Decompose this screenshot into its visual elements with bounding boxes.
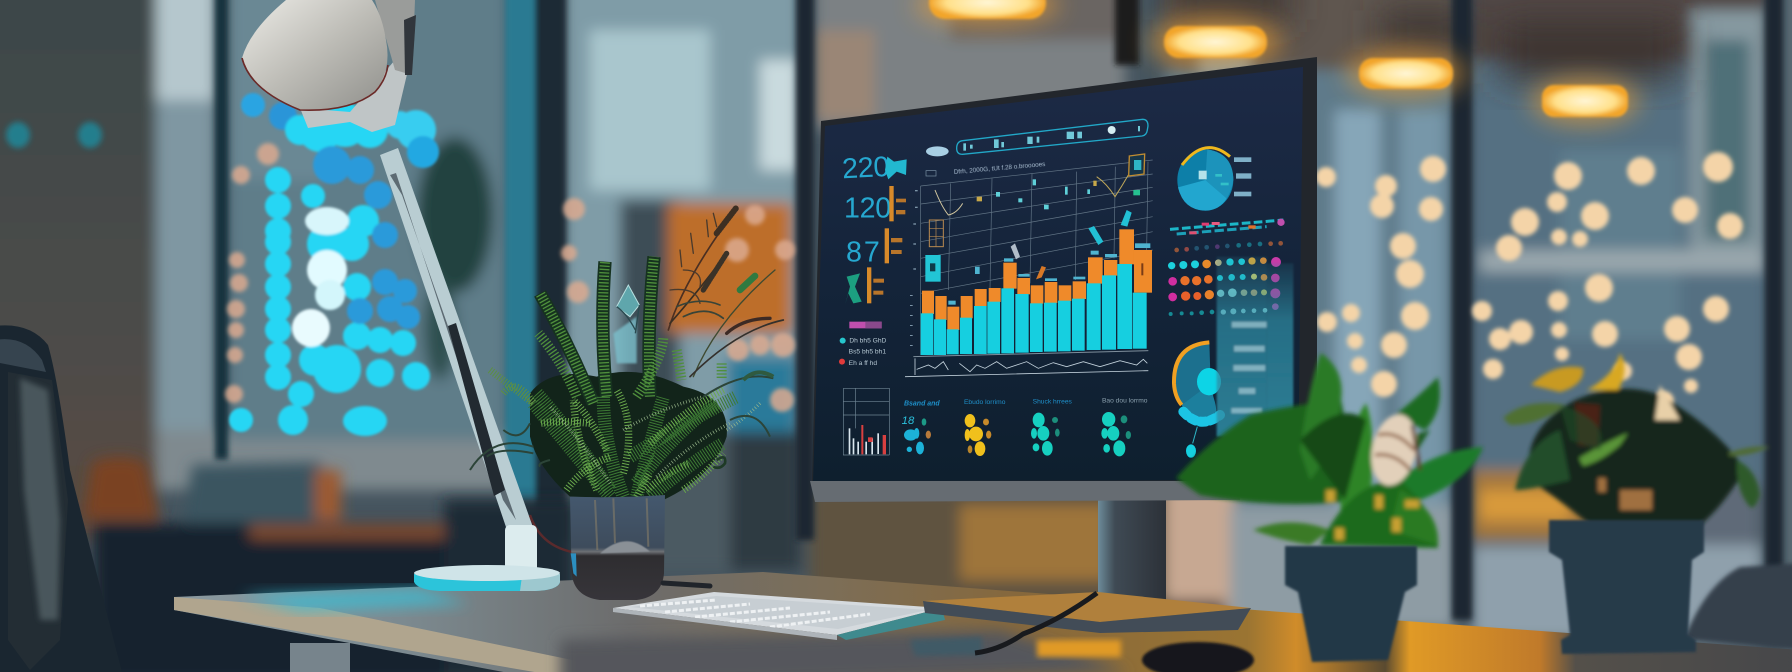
monitor cable and mouse [910, 593, 1254, 672]
pale leaf motif behind fern [613, 285, 639, 363]
bokeh lights: cyan cluster behind lamp [229, 93, 439, 436]
line chart grid [913, 160, 1153, 357]
lamp shade [242, 0, 388, 110]
chart caption: Dfrh, 2000G, tUt f.28 o.brooooes [954, 161, 1046, 176]
brown stems with small leaves [668, 207, 783, 377]
chart callout boxes [925, 154, 1145, 282]
orange segments [922, 229, 1152, 330]
cluster 2: yellow [964, 399, 1006, 456]
right potted plant [1503, 353, 1770, 654]
bokeh lights: warm right side [1316, 152, 1743, 411]
left legend: Bs5 bh5 bh1 [849, 349, 886, 356]
left legend: Eh a ff hd [849, 360, 877, 367]
middle potted plant [1176, 353, 1483, 662]
glass reflection panel [1217, 257, 1293, 437]
KPI: 87: 87 [846, 237, 882, 269]
gauge [1174, 342, 1221, 458]
KPI numbers [841, 151, 907, 305]
KPI: 120: 120 [844, 193, 891, 225]
lamp arm [380, 148, 534, 533]
cluster 4: teal: Bao dou lorrmo [1102, 398, 1148, 405]
cluster 3: teal [1031, 398, 1073, 456]
desk lamp [242, 0, 572, 591]
pie chart [1177, 148, 1251, 211]
desk [174, 572, 1792, 672]
right plant foliage [1503, 353, 1770, 525]
y axis ticks [910, 190, 918, 346]
stacked bar chart [921, 210, 1152, 355]
line chart traces [935, 175, 1128, 215]
middle pot [1285, 546, 1417, 662]
pen lying on desk [663, 583, 710, 586]
color key strips [1170, 219, 1285, 234]
top navigation pill [926, 119, 1148, 156]
foliage mass [530, 372, 727, 500]
office chair in foreground [0, 325, 122, 672]
lamp cable [530, 515, 572, 552]
dot matrix [1168, 241, 1283, 316]
middle plant foliage [1176, 353, 1483, 548]
desk leg [290, 643, 350, 672]
monitor frame [812, 57, 1317, 482]
KPI: 220: 220 [841, 151, 890, 185]
far right chair [1684, 563, 1792, 650]
ceramic vase [570, 495, 665, 600]
cluster 1: blue: 18 [902, 415, 915, 427]
cluster 1: blue: Bsand and [904, 400, 940, 407]
sparkline strip [905, 358, 1148, 377]
dashboard on screen [839, 119, 1293, 458]
left legend: Dh bh5 GhD [849, 337, 887, 344]
fern plant in ceramic vase [470, 207, 783, 600]
monitor screen [813, 67, 1303, 481]
monitor chin [810, 481, 1240, 502]
ceiling lights [915, 0, 1639, 125]
bar annotations [948, 210, 1150, 305]
keyboard [613, 592, 945, 640]
cyan segments [921, 264, 1147, 355]
left legend [839, 322, 887, 367]
lamp base [414, 525, 560, 591]
cluster 2: yellow: Ebudo lorrimo [964, 399, 1006, 406]
long thin leaves [470, 372, 773, 470]
background furniture: sofa and chairs [84, 457, 574, 672]
lamp joint [300, 60, 408, 132]
cluster cards [902, 398, 1148, 456]
mini bar chart [843, 388, 889, 455]
monitor stand [923, 498, 1251, 633]
right pot [1549, 520, 1704, 654]
cluster 3: teal: Shuck hrrees [1033, 398, 1073, 405]
bokeh lights: warm left side [225, 143, 795, 412]
cluster 1: blue [902, 400, 940, 454]
cluster 4: teal [1101, 398, 1148, 456]
fern fronds [490, 257, 760, 497]
